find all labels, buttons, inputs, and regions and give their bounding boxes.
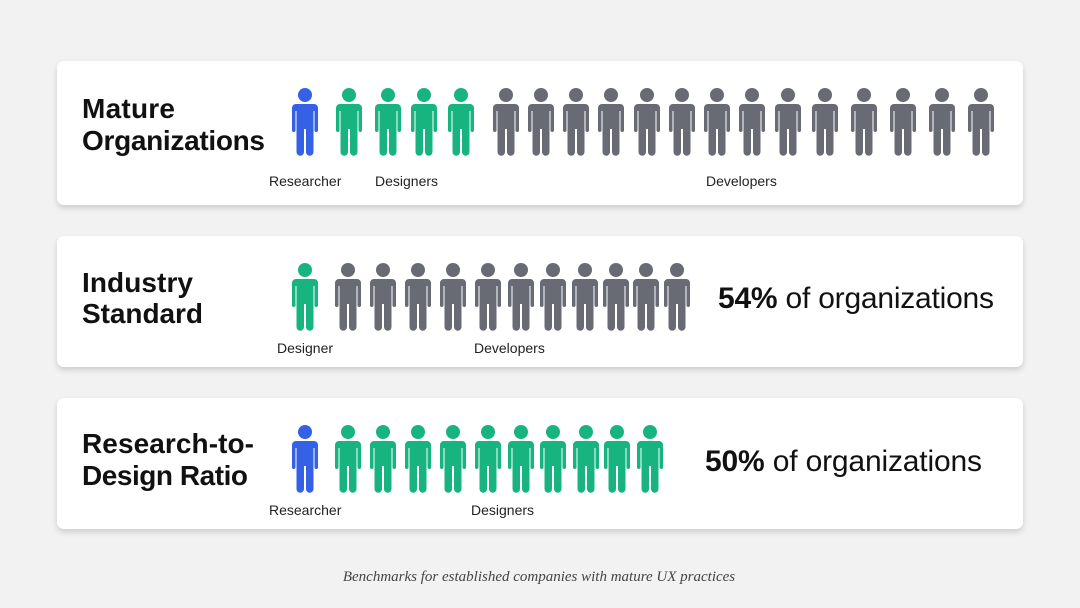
heading: mature organizations: Organizations	[82, 125, 265, 156]
heading: industry standard: Industry	[82, 267, 193, 298]
heading: research-to-design ratio: Design Ratio	[82, 460, 248, 491]
labels row 3: Designers	[471, 502, 534, 518]
heading: research-to-design ratio: Research-to-	[82, 428, 254, 459]
caption: Benchmarks for established companies with mature UX practices	[343, 569, 735, 585]
panel: research-to-design ratio	[57, 398, 1023, 529]
stat: 54%: 54% of organizations	[718, 282, 994, 315]
icon row: 1 researcher, 10 designers	[292, 425, 663, 493]
heading: mature organizations: Mature	[82, 93, 175, 124]
labels row 2: Developers	[474, 340, 545, 356]
labels row 1: Designers	[375, 173, 438, 189]
icon row: 1 researcher, 4 designers, 14 developers	[292, 88, 994, 156]
panel: industry standard	[57, 236, 1023, 367]
labels row 2: Designer	[277, 340, 333, 356]
labels row 1: Researcher	[269, 173, 342, 189]
icon row: 1 designer, 11 developers	[292, 263, 690, 331]
panel: mature organizations	[57, 61, 1023, 205]
heading: industry standard: Standard	[82, 298, 203, 329]
labels row 1: Developers	[706, 173, 777, 189]
stat: 50%: 50% of organizations	[705, 445, 982, 478]
labels row 3: Researcher	[269, 502, 342, 518]
